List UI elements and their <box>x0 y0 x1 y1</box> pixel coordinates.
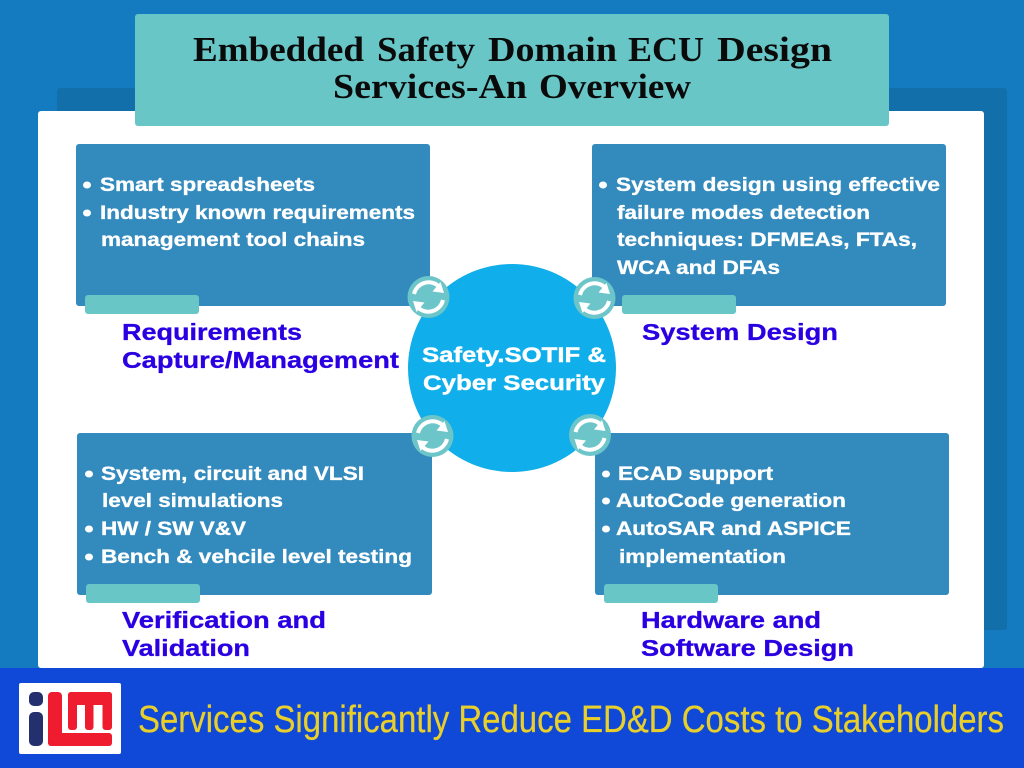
backing shadow panel <box>57 88 1007 630</box>
bullet list: hardware: ECAD support <box>618 463 774 485</box>
heading: verification <box>122 607 326 661</box>
title: Embedded <box>193 30 365 69</box>
bullet list: system design: System design using effective <box>616 174 940 196</box>
title: Safety <box>377 30 476 69</box>
bullet list: verification: Bench & vehcile level testing <box>101 546 412 568</box>
heading: hardware and software: Software Design <box>641 635 854 661</box>
bullet list: requirements <box>83 174 415 251</box>
panel: system design <box>592 144 946 314</box>
panel: verification and validation <box>77 433 432 603</box>
bullet list: requirements: Industry known requirements <box>100 202 415 224</box>
title banner <box>135 14 889 126</box>
bullet list: verification <box>85 463 412 568</box>
bullet list: hardware <box>602 463 851 568</box>
bullet list: hardware: implementation <box>619 546 786 568</box>
logo <box>19 683 121 754</box>
tab <box>604 584 718 603</box>
panel: hardware and software <box>595 433 949 603</box>
central label: Cyber Security <box>423 372 605 395</box>
footer bar <box>0 668 1024 768</box>
bullet list: hardware: AutoSAR and ASPICE <box>616 518 851 540</box>
heading: requirements <box>122 319 399 373</box>
heading: requirements: Requirements <box>122 319 302 345</box>
bullet list: requirements: Smart spreadsheets <box>100 174 315 196</box>
tab <box>622 295 736 314</box>
title: Domain <box>488 30 617 69</box>
title: ECU <box>628 30 704 69</box>
icon: refresh bottom right <box>569 414 611 456</box>
bullet list: hardware: AutoCode generation <box>616 490 846 512</box>
bullet list: system design: techniques: DFMEAs, FTAs, <box>617 229 917 251</box>
central circle <box>408 264 616 472</box>
heading: requirements: Capture/Management <box>122 347 399 373</box>
title: Overview <box>539 67 692 106</box>
bullet list: requirements: management tool chains <box>101 229 365 251</box>
white content panel <box>38 111 984 668</box>
icon: refresh bottom left <box>412 415 454 457</box>
heading: verification: Verification and <box>122 607 326 633</box>
central label <box>422 344 606 395</box>
bullet list: system design: WCA and DFAs <box>617 257 780 279</box>
bullet list: verification: System, circuit and VLSI <box>101 463 364 485</box>
tab <box>85 295 199 314</box>
bullet list: verification: HW / SW V&V <box>101 518 246 540</box>
bullet list: system design: failure modes detection <box>617 202 870 224</box>
heading: verification: Validation <box>122 635 250 661</box>
title <box>193 30 832 106</box>
central label: Safety.SOTIF & <box>422 344 606 367</box>
heading: hardware and software: Hardware and <box>641 607 821 633</box>
heading: system design: System Design <box>642 319 838 345</box>
title: Design <box>717 30 832 69</box>
panel: requirements capture <box>76 144 430 314</box>
title: Services-An <box>333 67 527 106</box>
heading: hardware and software <box>641 607 854 661</box>
icon: refresh top right <box>574 277 616 319</box>
bullet list: system design <box>599 174 940 279</box>
bullet list: verification: level simulations <box>102 490 283 512</box>
icon: refresh top left <box>408 276 450 318</box>
tab <box>86 584 200 603</box>
